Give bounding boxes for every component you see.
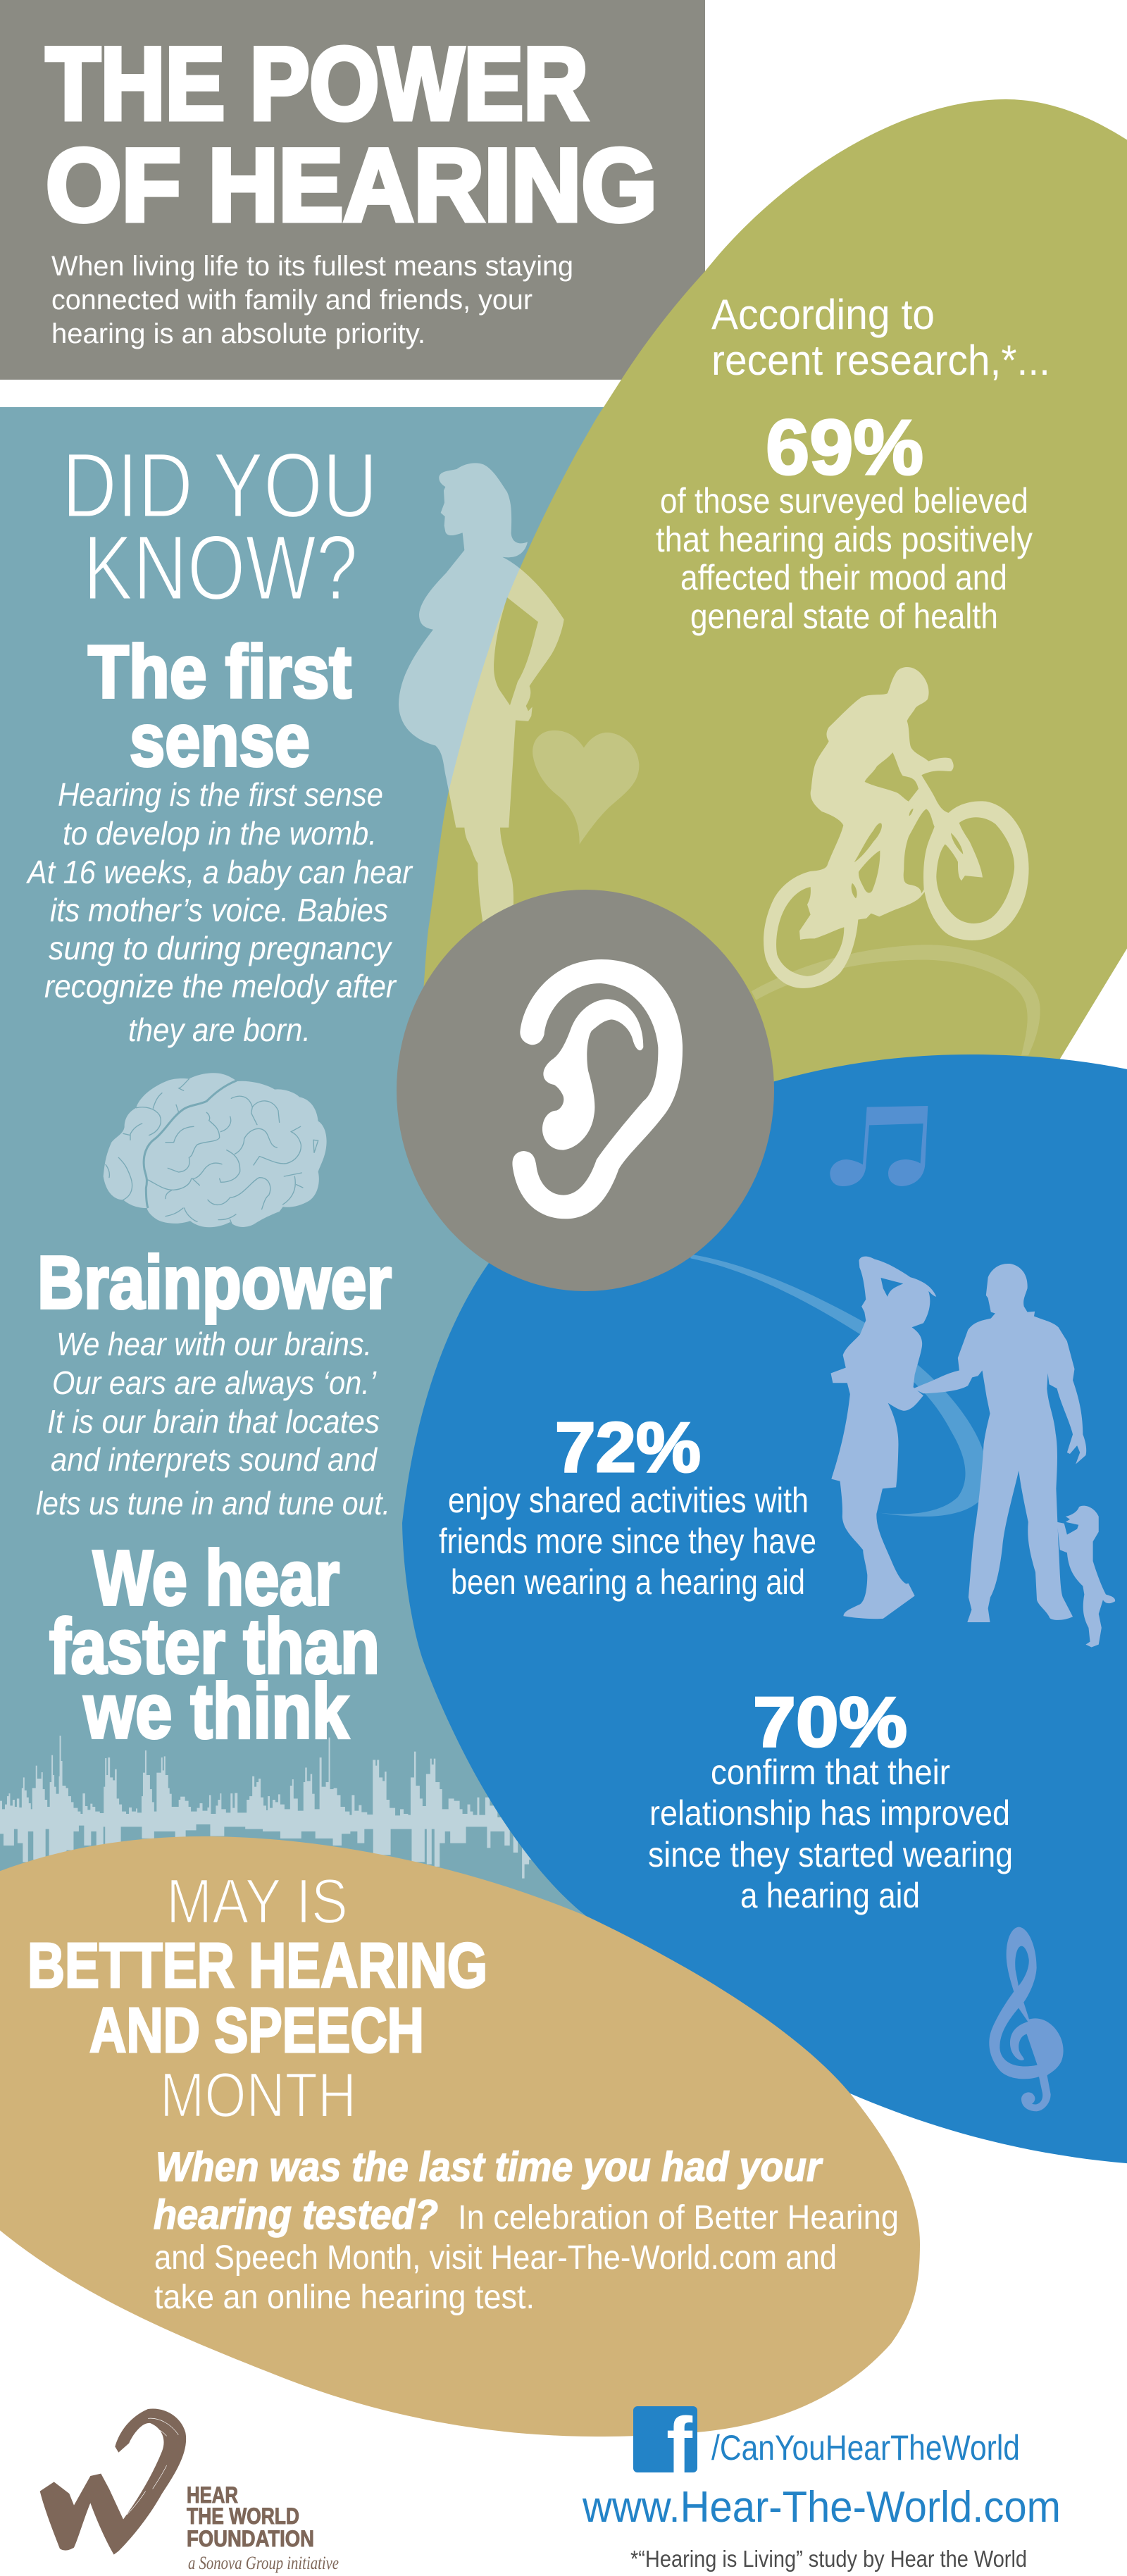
- panel: tan better hearing blob: [0, 1836, 920, 2437]
- stat: 72 percent: been wearing a hearing aid: [451, 1562, 805, 1602]
- swoosh behind couple: [690, 1255, 984, 1517]
- intro text: When living life to its fullest means staying: [51, 251, 573, 282]
- stat: 70 percent: [648, 1683, 1013, 1915]
- heading: may is better hearing and speech month: MAY IS: [166, 1867, 348, 1937]
- first sense text: [25, 776, 413, 1048]
- brainpower text: Our ears are always ‘on.’: [52, 1364, 377, 1401]
- call to action text: [154, 2144, 899, 2316]
- call to action text: take an online hearing test.: [154, 2279, 535, 2316]
- foundation name: FOUNDATION: [187, 2526, 314, 2551]
- first sense text: its mother’s voice. Babies: [50, 892, 388, 928]
- panel: olive research blob: [423, 99, 1127, 1197]
- icon: treble clef: [989, 1927, 1064, 2111]
- heading: we hear faster than we think: we think: [83, 1668, 349, 1755]
- heading: may is better hearing and speech month: MONTH: [160, 2060, 356, 2131]
- panel: did you know background: [0, 407, 613, 2027]
- call to action text: In celebration of Better Hearing: [458, 2199, 899, 2236]
- stat: 69 percent: general state of health: [690, 597, 998, 636]
- brainpower text: We hear with our brains.: [56, 1326, 372, 1362]
- icon: facebook: f: [666, 2401, 693, 2489]
- intro text: connected with family and friends, your: [51, 285, 533, 316]
- call to action text: When was the last time you had your: [156, 2144, 823, 2190]
- heading: may is better hearing and speech month: BETTER HEARING: [27, 1931, 487, 2001]
- heading: we hear faster than we think: We hear: [93, 1535, 340, 1622]
- stat: 70 percent: confirm that their: [711, 1753, 950, 1792]
- research heading: recent research,*...: [711, 337, 1050, 384]
- heading: may is better hearing and speech month: AND SPEECH: [89, 1996, 424, 2066]
- stat: 69 percent: affected their mood and: [680, 558, 1007, 597]
- call to action text: hearing tested?: [154, 2192, 438, 2238]
- first sense text: recognize the melody after: [44, 968, 397, 1004]
- first sense text: Hearing is the first sense: [58, 776, 383, 813]
- foundation name: HEAR: [187, 2482, 238, 2508]
- stat: 72 percent: enjoy shared activities with: [448, 1481, 809, 1520]
- heading: did you know: [62, 433, 378, 619]
- intro text: hearing is an absolute priority.: [51, 318, 425, 349]
- website url: www.Hear-The-World.com: [582, 2483, 1061, 2532]
- first sense text: At 16 weeks, a baby can hear: [25, 854, 413, 890]
- icon: ear: [512, 959, 683, 1219]
- facebook handle: /CanYouHearTheWorld: [711, 2428, 1020, 2468]
- call to action text: and Speech Month, visit Hear-The-World.com and: [154, 2239, 837, 2277]
- waveform: [0, 1736, 536, 1879]
- icon: brain: [104, 1073, 327, 1227]
- sonova tagline: a Sonova Group initiative: [188, 2553, 339, 2573]
- stat: 69 percent: of those surveyed believed: [660, 481, 1028, 521]
- heading: the first sense: [88, 630, 351, 782]
- stat: 72 percent: 72%: [555, 1408, 701, 1487]
- title: [46, 26, 657, 242]
- heading: the first sense: sense: [130, 699, 310, 782]
- research heading: [711, 291, 1050, 384]
- brainpower text: [36, 1326, 390, 1522]
- first sense text: sung to during pregnancy: [49, 930, 393, 966]
- first sense text: they are born.: [128, 1012, 311, 1048]
- footnote: *“Hearing is Living” study by Hear the World: [630, 2546, 1027, 2572]
- heading: did you know: DID YOU: [62, 433, 378, 537]
- heading: may is better hearing and speech month: [27, 1867, 487, 2131]
- stat: 70 percent: a hearing aid: [740, 1876, 920, 1915]
- icon: foundation W logo: [40, 2408, 186, 2555]
- stat: 70 percent: relationship has improved: [649, 1793, 1010, 1833]
- foundation name: [187, 2482, 314, 2551]
- stat: 69 percent: that hearing aids positively: [656, 520, 1033, 559]
- icon: cyclist silhouette: [764, 667, 1029, 988]
- title: OF HEARING: [46, 127, 657, 242]
- stat: 69 percent: 69%: [766, 404, 923, 491]
- brainpower text: and interprets sound and: [51, 1441, 378, 1478]
- panel: blue survey blob: [402, 1054, 1127, 2164]
- icon: music notes: [830, 1106, 928, 1186]
- brainpower text: lets us tune in and tune out.: [36, 1485, 390, 1522]
- icon: heart: [533, 730, 639, 845]
- heading: we hear faster than we think: [49, 1535, 380, 1755]
- heading: did you know: KNOW?: [83, 516, 358, 619]
- heading: the first sense: The first: [88, 630, 351, 714]
- panel: central grey circle: [397, 890, 774, 1291]
- heading: brainpower: Brainpower: [37, 1241, 392, 1324]
- first sense text: to develop in the womb.: [63, 815, 377, 852]
- foundation name: THE WORLD: [187, 2503, 299, 2529]
- icon: pregnant woman silhouette: [399, 463, 564, 928]
- research heading: According to: [711, 291, 935, 338]
- heading: we hear faster than we think: faster than: [49, 1603, 380, 1690]
- icon: couple and dog silhouette: [831, 1257, 1115, 1648]
- intro text: [51, 251, 573, 349]
- stat: 69 percent: [656, 404, 1033, 636]
- swoosh under bicycle: [752, 945, 1040, 1055]
- brainpower text: It is our brain that locates: [47, 1403, 380, 1440]
- stat: 72 percent: [439, 1408, 816, 1602]
- stat: 70 percent: 70%: [753, 1683, 907, 1762]
- icon: facebook: [633, 2401, 697, 2489]
- title: THE POWER: [46, 26, 588, 141]
- stat: 72 percent: friends more since they have: [439, 1522, 816, 1561]
- panel: title background: [0, 0, 705, 380]
- stat: 70 percent: since they started wearing: [648, 1835, 1013, 1874]
